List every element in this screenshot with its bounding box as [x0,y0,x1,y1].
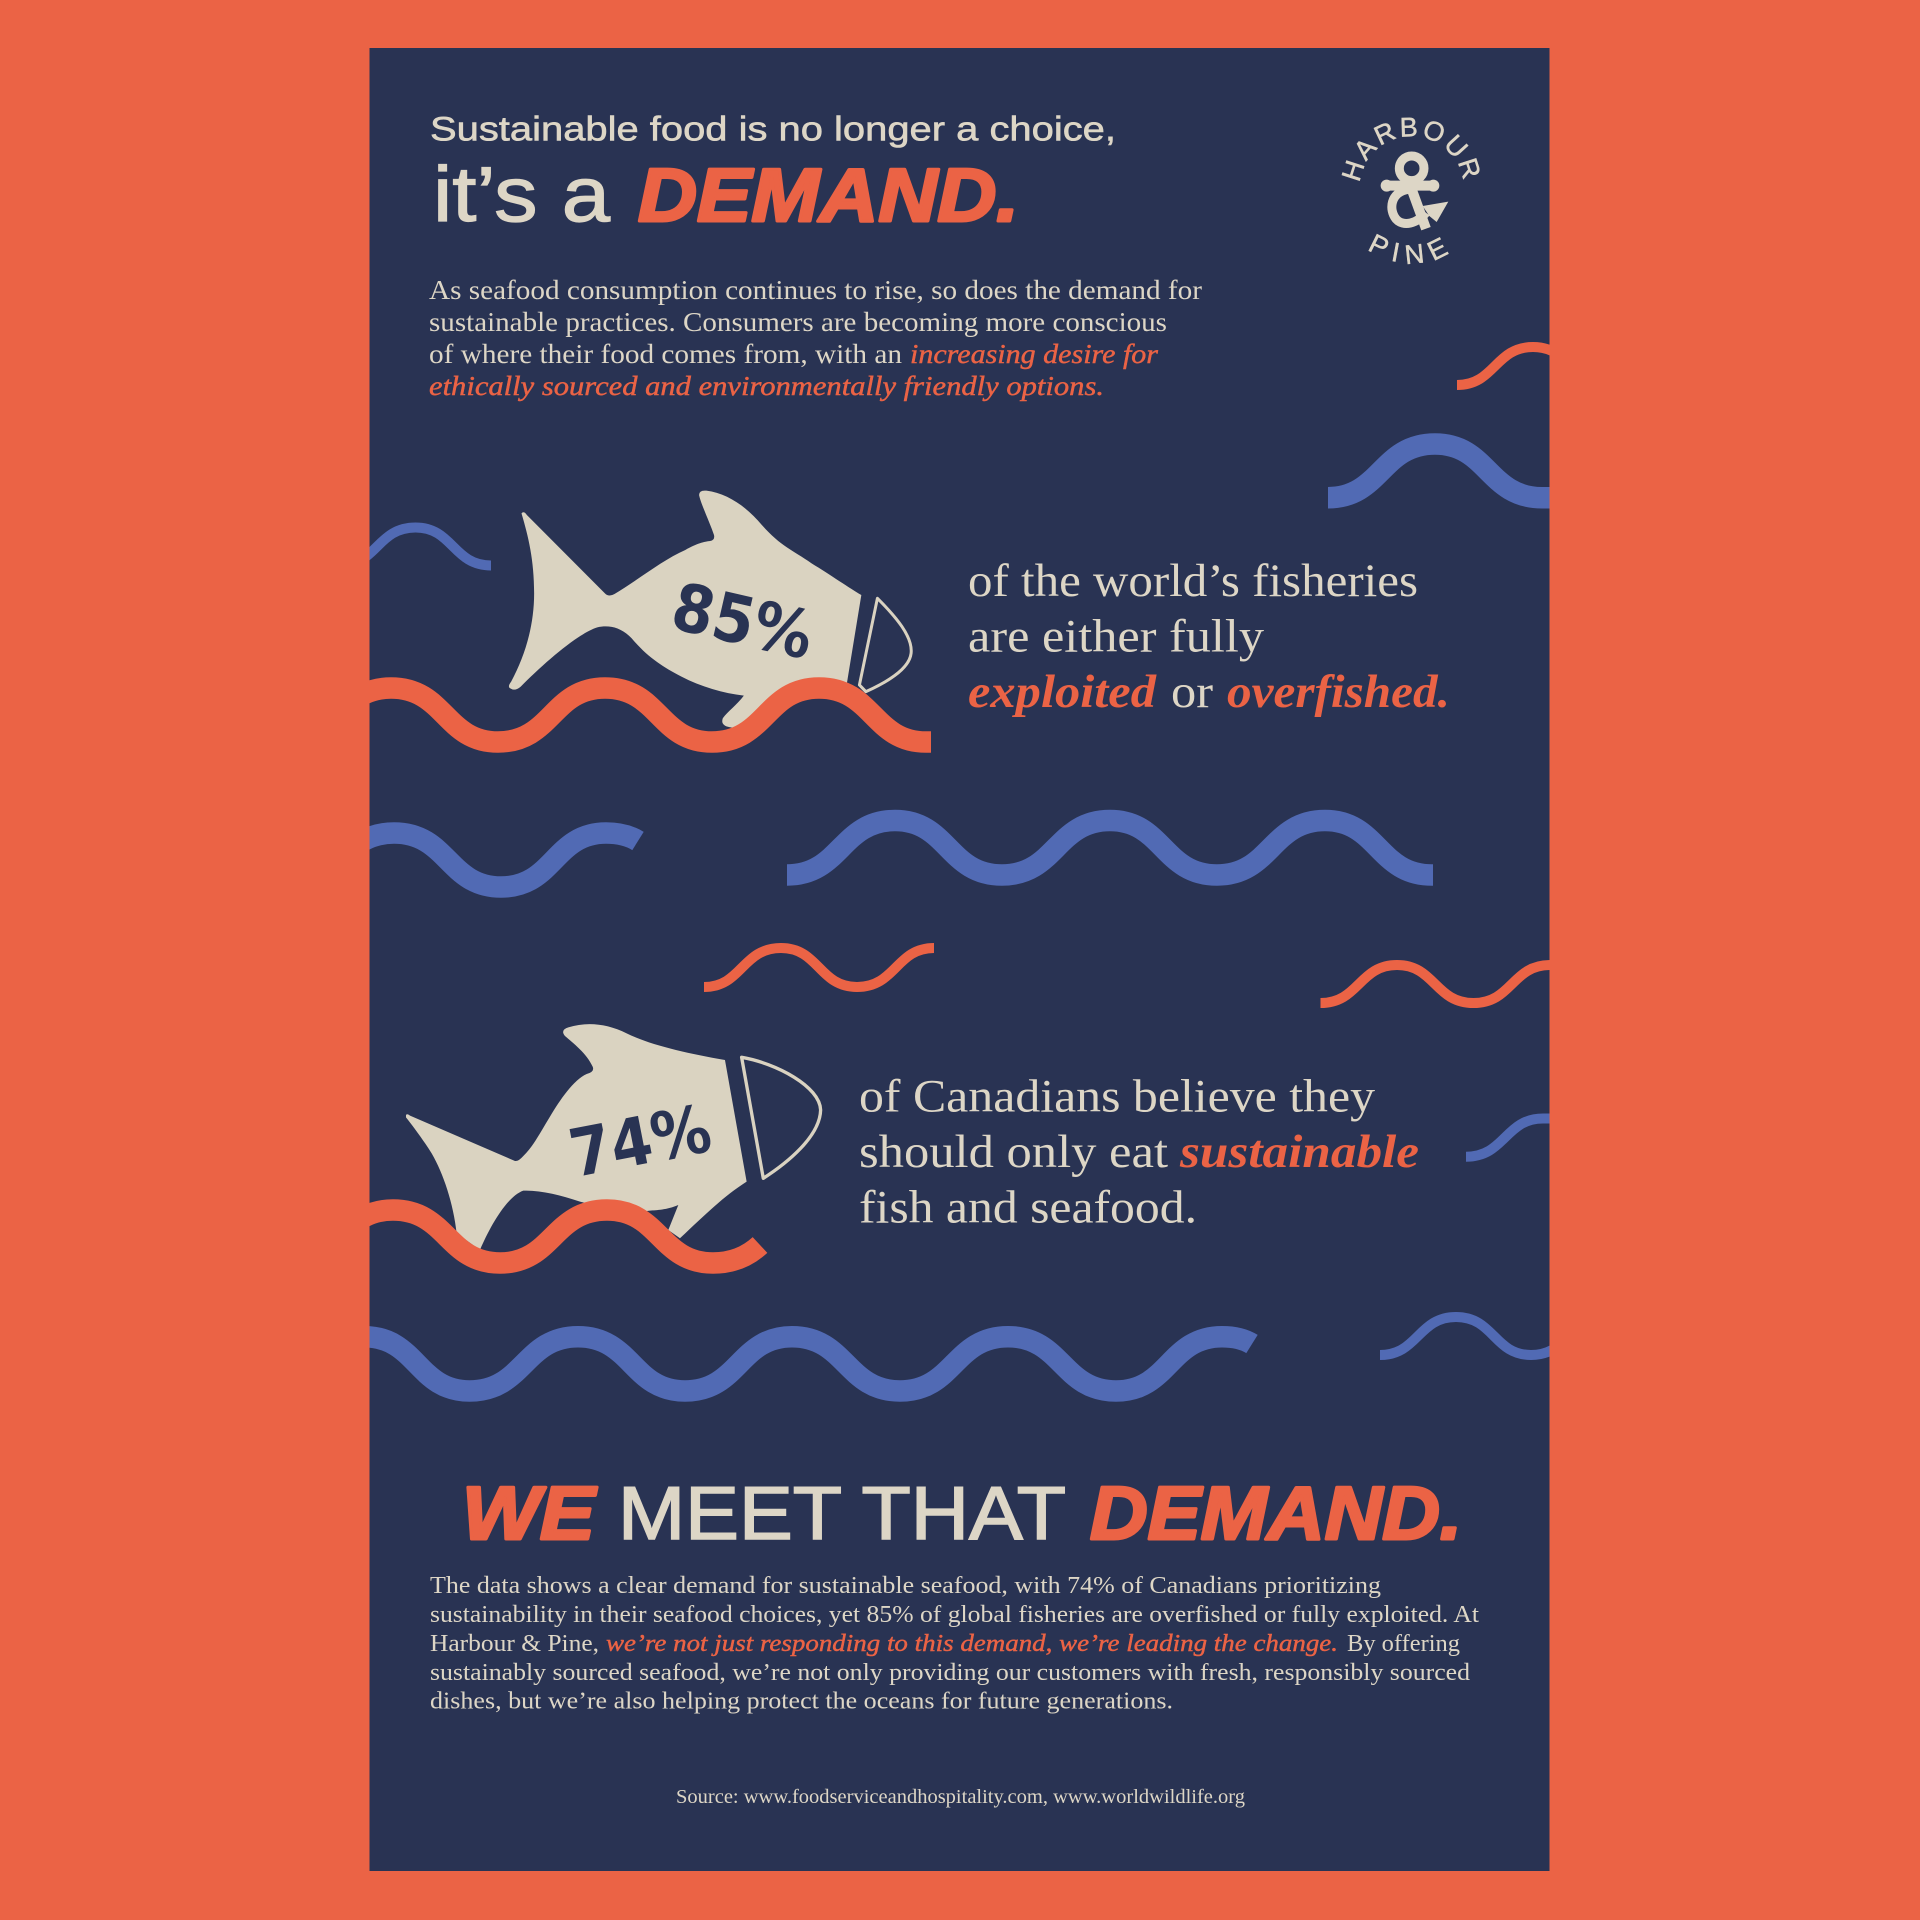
closing text block: By offering [1347,1630,1460,1657]
fish head outline [859,598,911,692]
wave: coral under fish 85% [284,688,931,742]
wave: blue row right [787,820,1433,875]
wave: blue small bottom right [1380,1317,1607,1355]
title: it’s a [433,150,611,238]
wave: coral under fish 74% [286,1210,760,1263]
stat text: 85%: exploited [968,666,1158,718]
closing text block: Harbour & Pine, [430,1630,599,1657]
stat text: 74%: of Canadians believe they [859,1070,1376,1122]
logo: Harbour & Pine [1342,118,1480,264]
heading: we meet that demand: MEET THAT [618,1471,1066,1555]
stat text: 74%: sustainable [1179,1126,1419,1178]
fish 85% [509,491,911,728]
intro text block [429,274,1202,401]
source line: Source: www.foodserviceandhospitality.com, www.worldwildlife.org [676,1787,1245,1808]
logo text: Harbour: HARBOUR [1342,118,1480,181]
heading: we meet that demand: WE [462,1471,597,1555]
wave: blue big bottom [364,1337,1252,1391]
title [431,115,1113,223]
fish body [406,1024,747,1250]
closing text block: we’re not just responding to this demand, we’re leading the change. [606,1630,1338,1657]
title: DEMAND. [638,153,1019,237]
stat text: 85%: overfished. [1227,666,1450,718]
intro text block: of where their food comes from, with an [429,338,902,369]
stat 85%: 85% [665,568,821,675]
closing text block: sustainably sourced seafood, we’re not only providing our customers with fresh, responsibly sourced [430,1659,1470,1686]
heading: we meet that demand [466,1486,1457,1541]
intro text block: As seafood consumption continues to rise, so does the demand for [429,274,1202,305]
stat text: 74%: fish and seafood. [859,1182,1197,1234]
wave: blue row left [286,833,638,887]
panel: poster [370,48,1550,1871]
wave: coral small right [1320,965,1550,1003]
closing text block [430,1572,1479,1714]
intro text block: increasing desire for [910,338,1158,369]
wave: top right coral [1457,342,1550,390]
heading: we meet that demand: DEMAND. [1090,1471,1462,1555]
logo text: Pine: PINE [1368,234,1449,264]
title: Sustainable food is no longer a choice, [430,110,1116,148]
fish head outline [742,1057,821,1178]
closing text block: sustainability in their seafood choices, yet 85% of global fisheries are overfished or fully exploited. At [430,1601,1479,1628]
stat text: 85% [968,555,1450,718]
stat text: 74% [860,1078,1418,1223]
closing text block: The data shows a clear demand for sustainable seafood, with 74% of Canadians prioritizing [430,1572,1381,1599]
intro text block: ethically sourced and environmentally friendly options. [429,370,1104,401]
closing text block: dishes, but we’re also helping protect the oceans for future generations. [430,1688,1173,1714]
intro text block: sustainable practices. Consumers are becoming more conscious [429,306,1167,337]
fish body [509,491,861,728]
wave: top right blue [1328,444,1560,498]
wave: coral small centre [704,948,934,987]
wave: left small blue [340,528,491,566]
stat text: 85%: are either fully [968,610,1265,662]
stat 74%: 74% [563,1090,717,1193]
icon: anchor ampersand [1381,156,1448,229]
wave: blue right small middle [1466,1118,1560,1157]
fish 74% [406,1024,821,1250]
stat text: 74%: should only eat [859,1126,1168,1178]
stat text: 85%: or [1171,666,1213,718]
stat text: 85%: of the world’s fisheries [968,555,1418,607]
